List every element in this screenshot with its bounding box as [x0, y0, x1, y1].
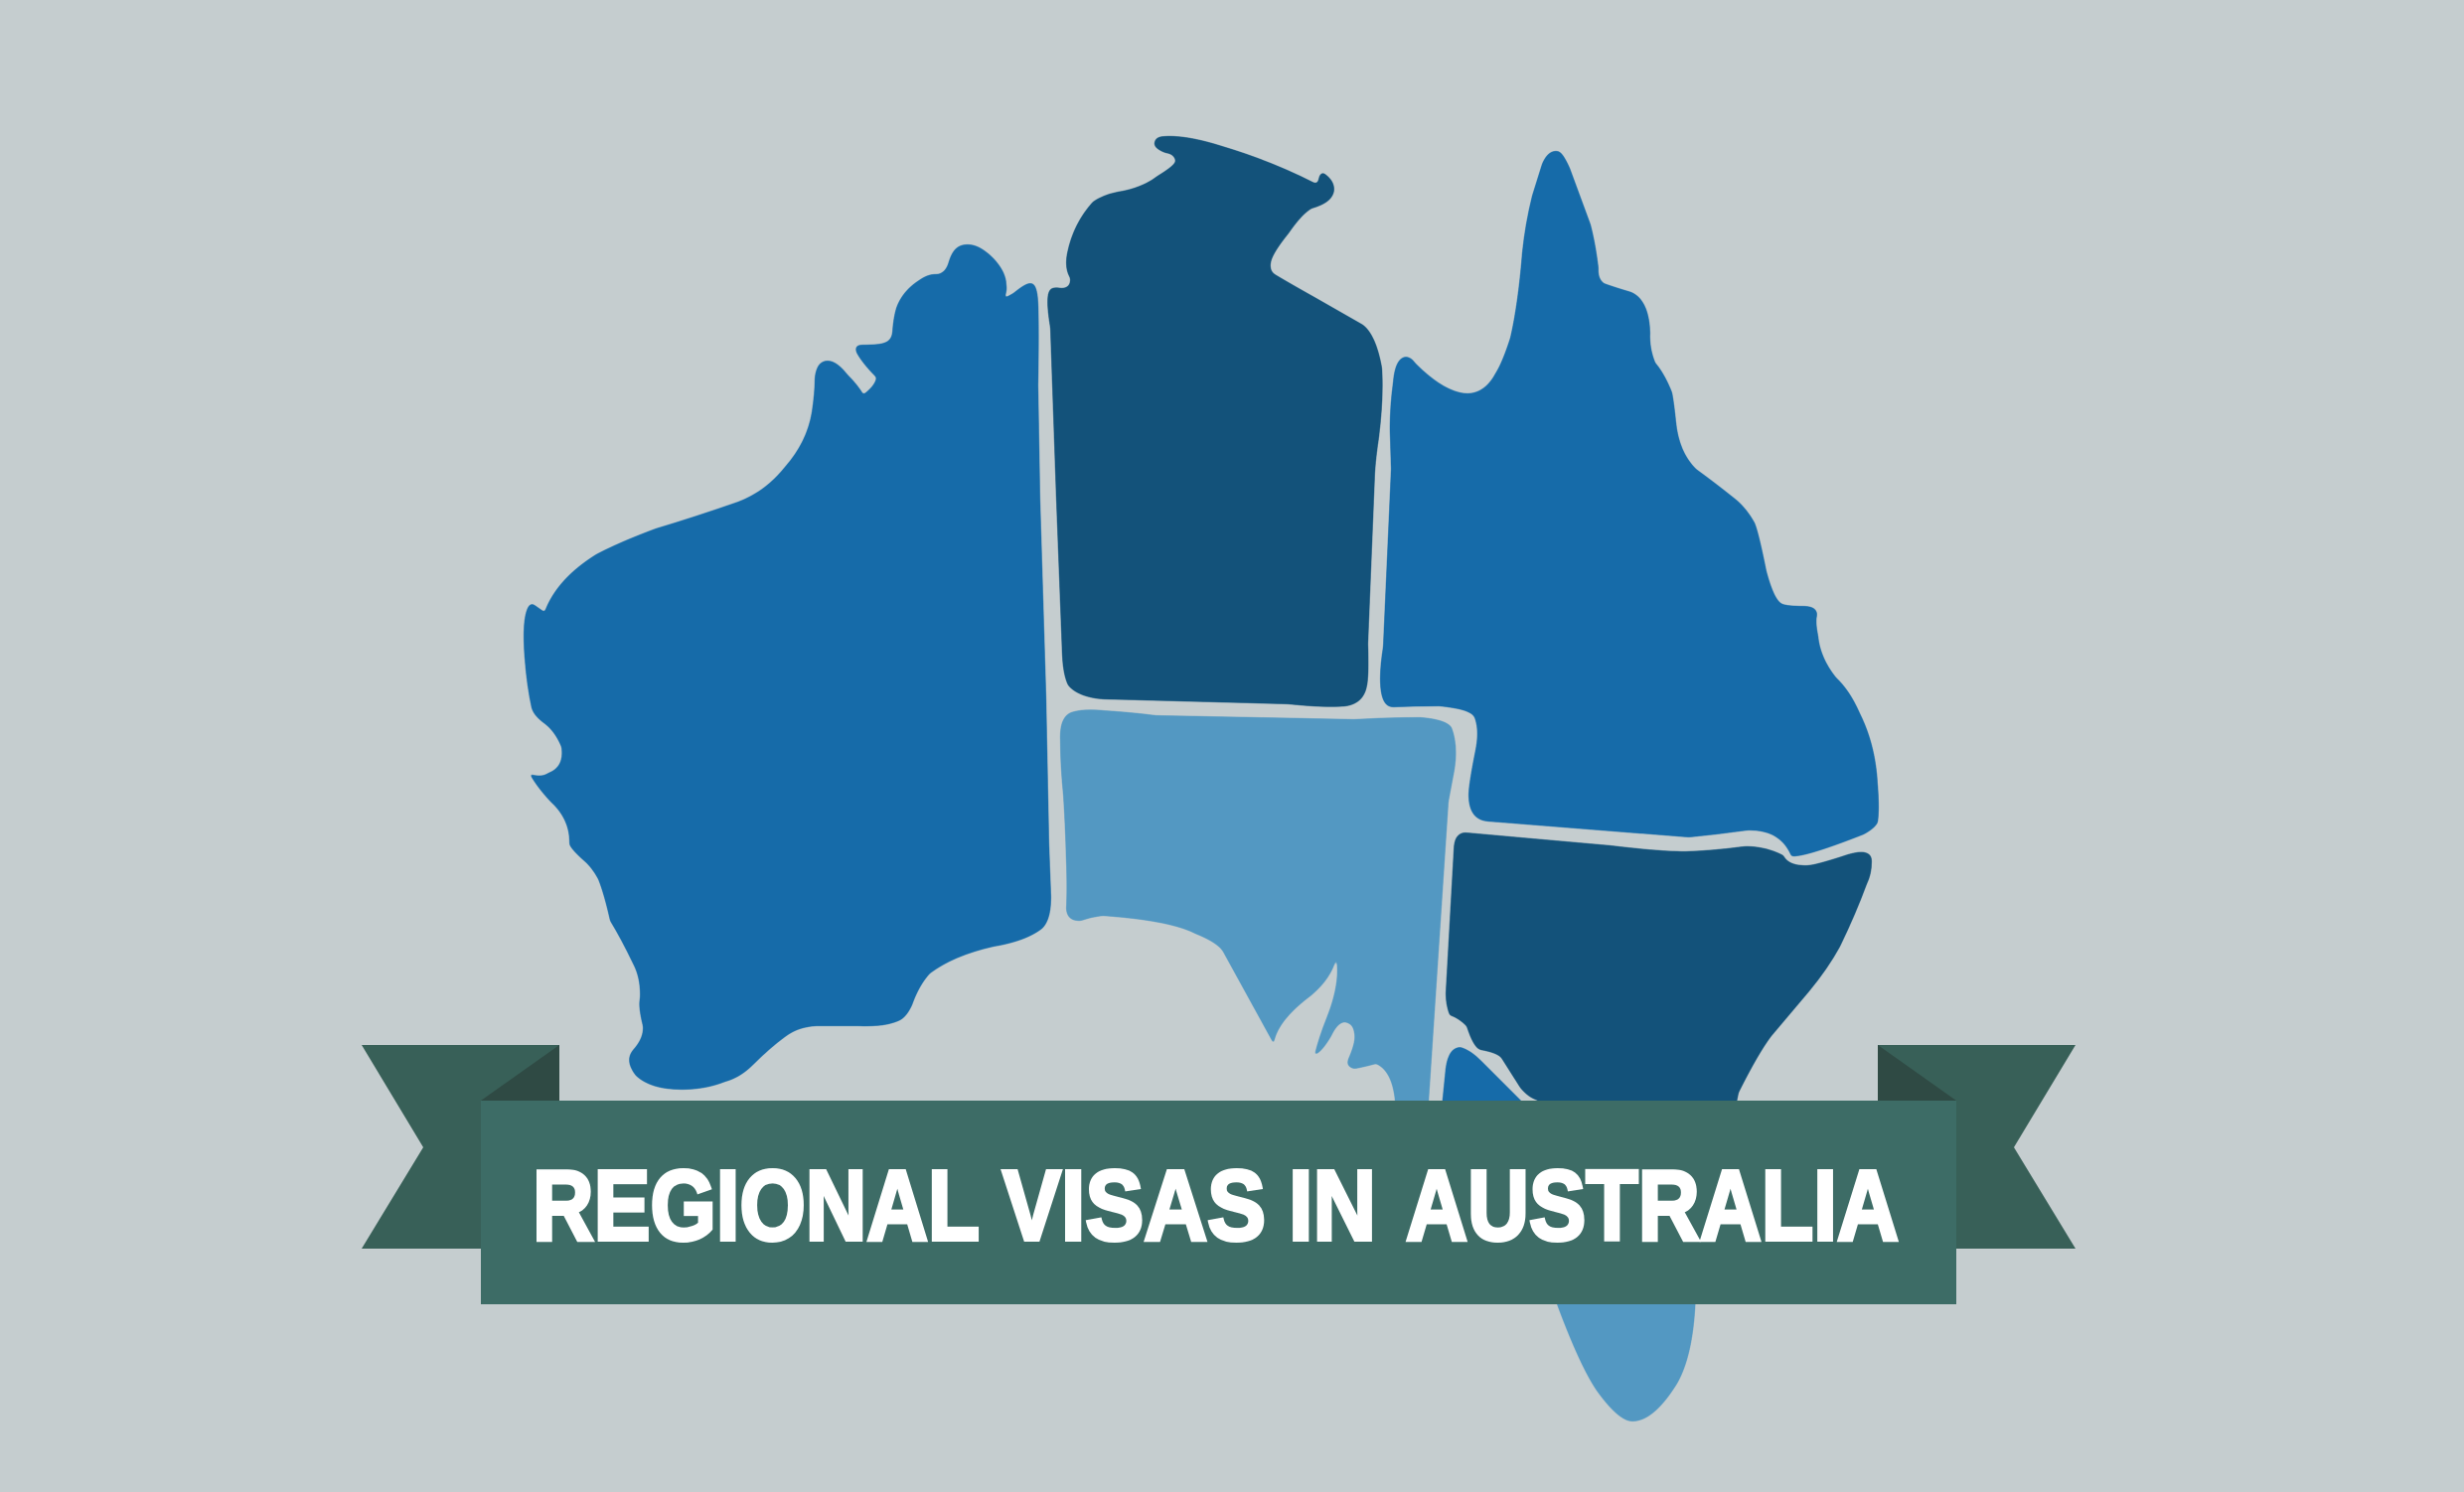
region: Northern Territory [1047, 136, 1383, 707]
region: Victoria [1441, 1047, 1538, 1118]
region: New South Wales [1446, 832, 1872, 1118]
ribbon banner [362, 1045, 2076, 1304]
banner panel [481, 1101, 1956, 1304]
map of Australia [524, 136, 1879, 1421]
region: Western Australia [524, 244, 1051, 1090]
ribbon tail: left [362, 1045, 559, 1249]
region: Tasmania [1552, 1281, 1696, 1421]
ribbon fold: left [481, 1045, 559, 1101]
ribbon fold: right [1878, 1045, 1956, 1101]
title [533, 1150, 1899, 1262]
ribbon tail: right [1878, 1045, 2076, 1249]
title: IN [1289, 1150, 1376, 1262]
region: South Australia [1060, 709, 1456, 1118]
title: REGIONAL [533, 1150, 980, 1262]
title: AUSTRALIA [1406, 1150, 1899, 1262]
title: VISAS [1002, 1150, 1266, 1262]
region: Queensland [1380, 151, 1879, 856]
